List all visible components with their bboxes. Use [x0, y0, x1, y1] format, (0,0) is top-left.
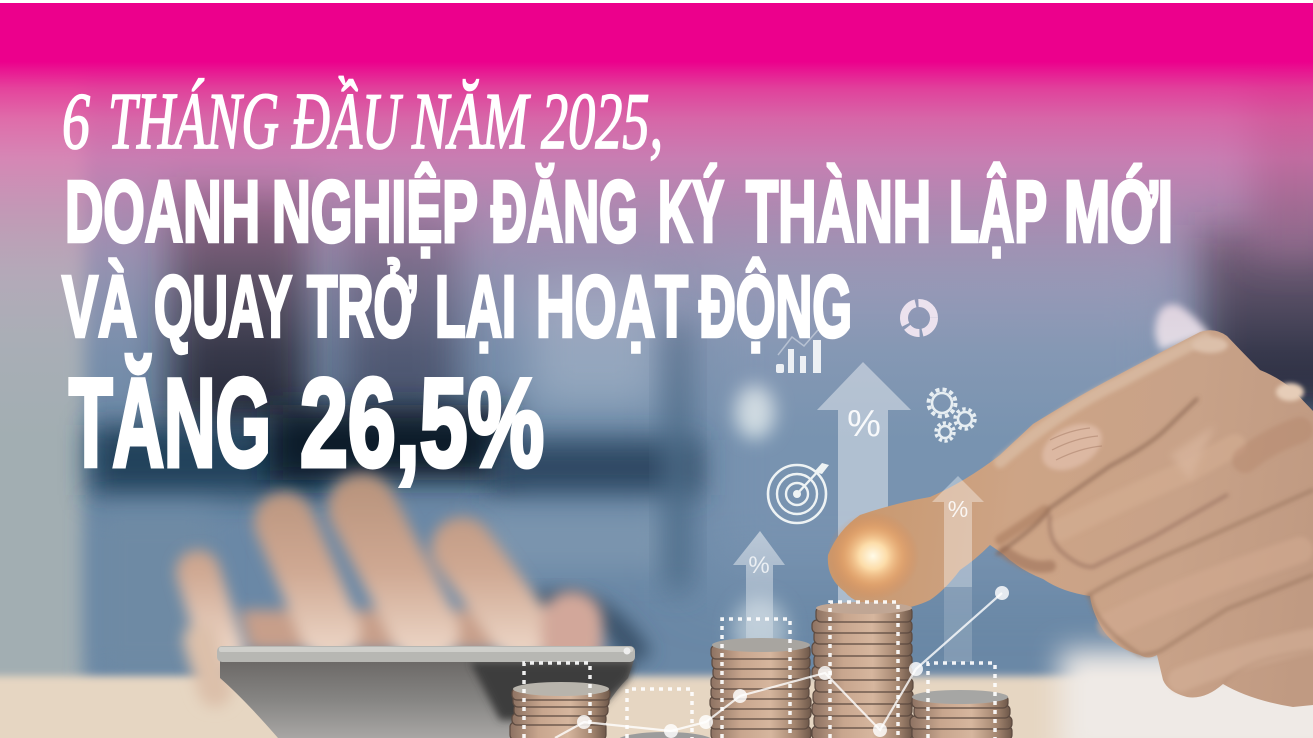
title line 1: ĐẦU [291, 76, 403, 166]
finger shading [997, 338, 1313, 684]
top white hairline [0, 0, 1313, 3]
title line 1: NĂM [411, 78, 531, 166]
title line 2: MỚI [1064, 164, 1173, 260]
icon: donut chart [904, 303, 934, 333]
icon: target with arrow [768, 463, 829, 523]
arrow: right over finger: % [948, 496, 968, 522]
arrow: right over finger [932, 476, 984, 662]
coin stack 3 [812, 602, 914, 738]
arrow: medium behind coin stack: % [748, 552, 770, 579]
title line 2 [65, 164, 1173, 260]
title line 3: VÀ [62, 258, 137, 356]
blurred left hand on calculator [198, 508, 572, 690]
title line 3: QUAY [154, 258, 292, 356]
coin partial top [617, 732, 713, 738]
title line 1: THÁNG [108, 78, 279, 166]
knuckle wrinkles [1034, 414, 1110, 480]
coin stack 2 [710, 638, 811, 738]
knuckle highlights [1276, 383, 1304, 401]
icon: bar chart [776, 330, 821, 373]
title line 1: 2025, [541, 78, 663, 166]
right hand pointing [828, 330, 1313, 707]
pink gradient overlay [0, 0, 1313, 440]
arrow: large centre: % [847, 403, 881, 445]
arrow: medium behind coin stack [733, 531, 785, 680]
title line 4: headline figure: TĂNG [69, 354, 271, 493]
title line 2: NGHIỆP [272, 164, 478, 260]
title line 2: LẬP [949, 164, 1047, 260]
title line 3: ĐỘNG [699, 258, 852, 356]
title line 2: THÀNH [746, 164, 931, 260]
icon: gears [928, 390, 975, 441]
arrow: large centre [817, 362, 911, 610]
title line 3: TRỞ [307, 258, 416, 356]
line chart [555, 586, 1009, 738]
title line 1: 6 [62, 78, 90, 166]
title line 2: ĐĂNG [491, 164, 638, 260]
title line 3 [62, 258, 852, 356]
coin stack 1 [510, 682, 610, 738]
title line 2: KÝ [658, 164, 724, 260]
coin stack 4 [910, 690, 1012, 738]
fingertip glow [827, 512, 919, 600]
title line 3: LẠI [435, 258, 516, 356]
title line 3: HOẠT [536, 258, 688, 356]
title line 2: DOANH [65, 164, 260, 260]
title line 1 [62, 76, 663, 166]
dotted frames [524, 602, 995, 738]
calculator [217, 646, 635, 738]
title line 4: headline figure: 26,5% [300, 354, 544, 493]
